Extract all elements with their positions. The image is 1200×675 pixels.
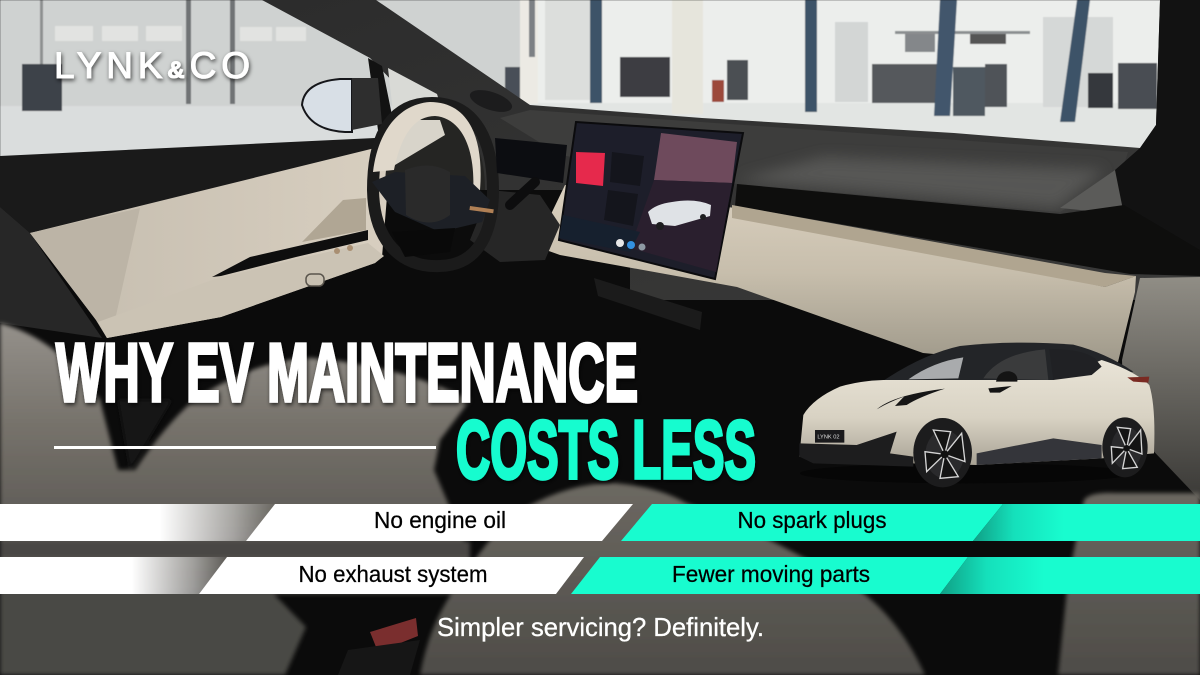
central touchscreen [559,122,743,279]
car roof and glass [883,343,1133,385]
title line two: COSTS LESS [456,403,756,496]
headlight [877,389,945,409]
row two benefits [0,557,1200,594]
door panel [30,148,390,338]
door handle slash [988,386,1012,393]
beige lower dash [540,185,1136,362]
wheel spokes [372,172,490,232]
front lower grille [799,432,913,467]
side windows [983,349,1048,380]
car body [799,360,1154,465]
bar: no exhaust system [199,557,584,594]
wheel lower opening [392,228,455,257]
bar: fewer moving parts: Fewer moving parts [672,561,870,587]
beige top of wheel [373,102,481,193]
bar: no engine oil: No engine oil [374,507,506,533]
decorative rule [54,446,436,449]
windshield [908,357,963,379]
A-pillar and dashboard top [262,0,1200,300]
small quarter window [388,68,448,130]
right pillar [1115,0,1200,275]
rear wheel [1102,417,1148,477]
brand logo: LYNK&CO [54,45,250,86]
bar: no spark plugs [621,504,1003,541]
instrument cluster [495,138,567,183]
row one benefits [0,504,1200,541]
wheel opening background [385,112,485,190]
bar: no spark plugs: No spark plugs [738,507,886,533]
bar: no engine oil [246,504,633,541]
window strut [368,58,395,130]
title line one: WHY EV MAINTENANCE [56,326,638,419]
glossy black dash band [735,184,1200,276]
wheel hub [405,165,450,222]
workshop view through windows [0,0,1200,160]
dash top surface [500,110,1128,212]
right trim panel [1122,277,1200,500]
white fade bar [0,557,227,594]
closing line: Simpler servicing? Definitely. [437,612,764,642]
air vent [594,278,702,330]
teal end bar [940,557,1200,594]
tail light [1127,377,1149,383]
indicator stalk [510,182,535,205]
dash speaker [467,86,515,116]
beige trim strip [732,205,1136,287]
lower dark surround [430,190,630,330]
electric car: LYNK 02 [817,435,840,441]
bar: fewer moving parts [571,557,968,594]
door sill [977,438,1102,465]
steering column [470,190,560,262]
teal end bar [973,504,1200,541]
car shadow [800,463,1133,483]
side mirror [302,79,352,132]
mirror [996,371,1017,382]
bar: no exhaust system: No exhaust system [298,561,488,587]
white fade bar [0,504,275,541]
number plate [815,430,844,443]
wheel rim [373,103,493,266]
door shoulder band [0,138,378,233]
front wheel [913,418,972,487]
seat belt buckle [370,618,418,652]
left seats [0,323,1200,675]
electric car [799,343,1154,487]
steering wheel [372,102,567,266]
